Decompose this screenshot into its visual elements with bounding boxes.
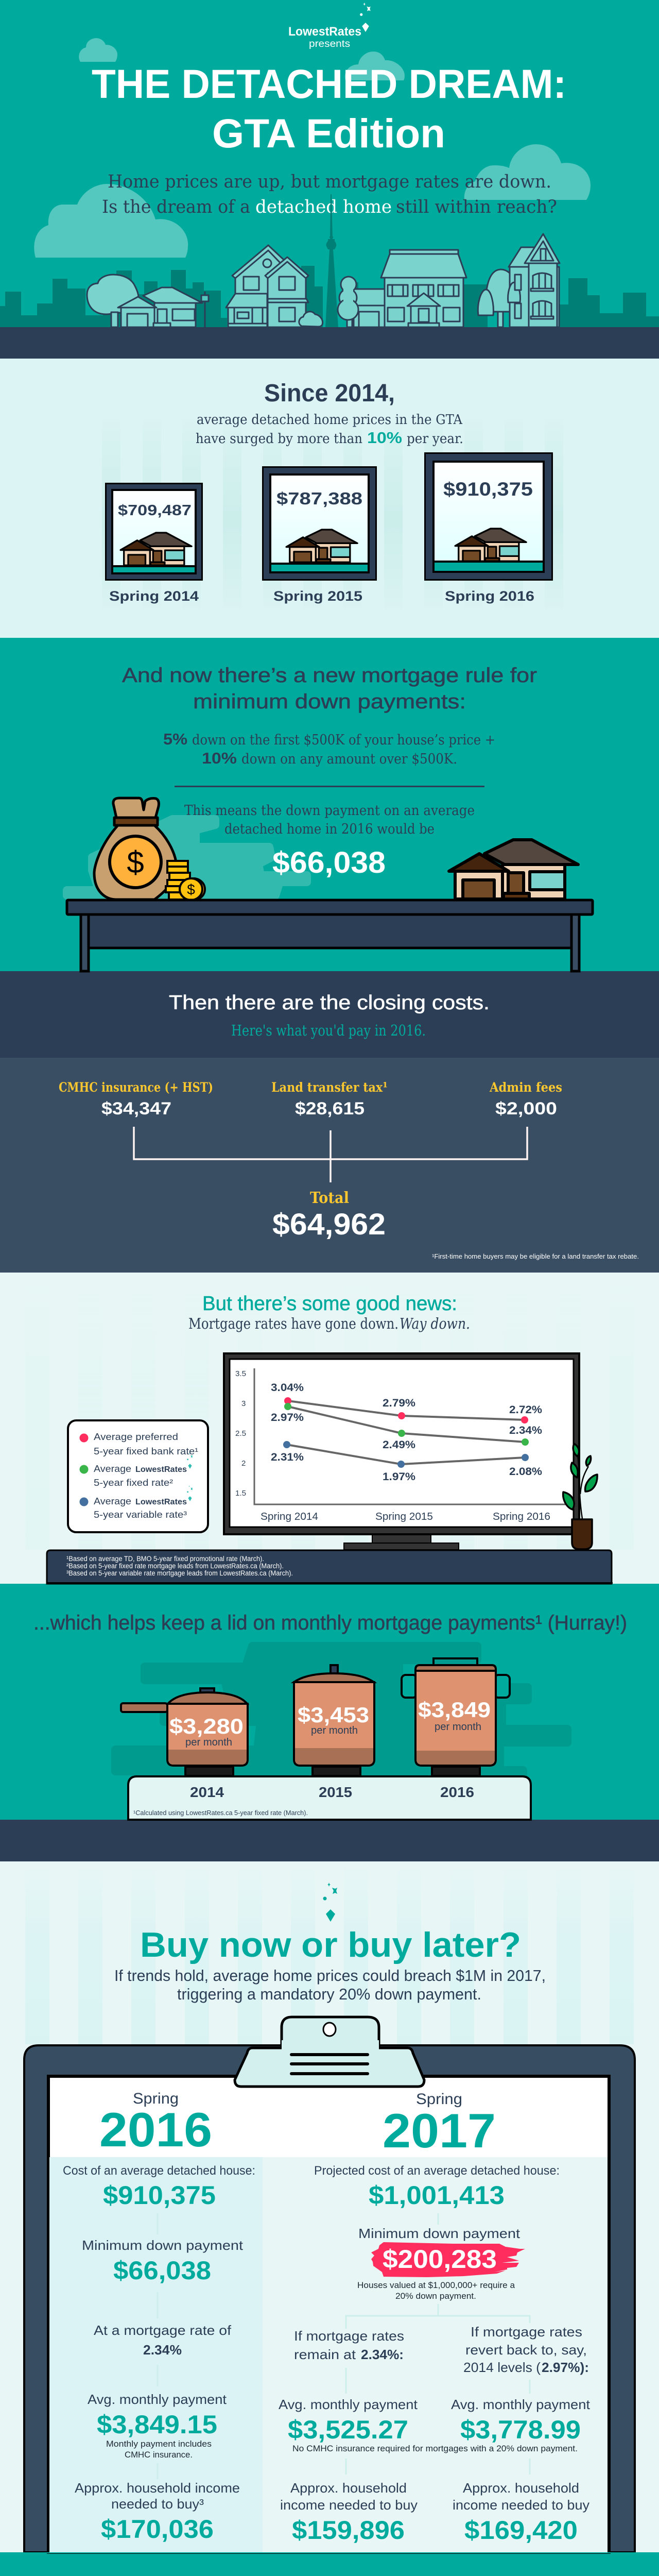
legend: [68, 1420, 208, 1532]
value labels: 3.04%: [271, 1382, 304, 1394]
background stripes: [102, 411, 563, 609]
column: 2017: $1,001,413: [369, 2181, 505, 2210]
panel: shop around: [0, 2552, 659, 2576]
down payment text: This means the down payment on an average: [184, 803, 475, 819]
legend: LowestRates: [135, 1465, 187, 1474]
column: 2017: remain at: [294, 2347, 356, 2362]
cost labels: Admin fees: [489, 1080, 562, 1095]
column: 2016: Minimum down payment: [82, 2238, 244, 2253]
y labels: 1.5: [235, 1489, 246, 1498]
x labels: [261, 1511, 550, 1522]
icon: money bag: $: [127, 845, 144, 879]
houses: [87, 234, 560, 327]
y labels: 2: [241, 1459, 246, 1468]
panel: hero: [0, 3, 659, 359]
text block: have surged by more than: [196, 431, 362, 447]
column: 2017: Projected cost of an average detached house:: [314, 2164, 560, 2178]
bracket: [134, 1127, 527, 1182]
frame: spring 2015: [263, 467, 376, 604]
panel: monthly payments: [33, 1612, 627, 1820]
plinth: [128, 1776, 531, 1820]
column: 2017: Approx. household: [290, 2480, 407, 2496]
frame: spring 2016: $910,375: [443, 479, 533, 500]
heading: And now there’s a new mortgage rule for: [122, 664, 537, 687]
cost values: $34,347: [101, 1099, 171, 1118]
column: 2017: $3,778.99: [460, 2415, 581, 2444]
pot 2016: [402, 1658, 510, 1776]
connector lines: [158, 2213, 530, 2479]
text block: [196, 412, 463, 447]
icon: two-gable house: [226, 245, 323, 327]
value labels: [271, 1382, 542, 1483]
subtitle: Is the dream of a: [102, 197, 250, 217]
intro text: If trends hold, average home prices could breach $1M in 2017,: [114, 1967, 546, 1985]
column: 2017: If mortgage rates: [294, 2328, 404, 2344]
text block: per year.: [407, 431, 463, 447]
legend: 5-year fixed bank rate¹: [94, 1446, 198, 1456]
logo: LowestRates presents: [288, 3, 371, 49]
heading: [122, 664, 537, 713]
chart: monitor: [224, 1353, 579, 1550]
icon: coins: [166, 861, 205, 900]
icon: ranch house: [87, 275, 209, 327]
callout: brush highlight: $200,283: [383, 2245, 497, 2274]
icon: sparkles: [323, 1883, 337, 1922]
down payment text: $66,038: [272, 846, 386, 879]
cost labels: [59, 1080, 562, 1095]
frame: spring 2014: [106, 483, 202, 604]
column: 2017: Minimum down payment: [358, 2226, 521, 2241]
cost values: $2,000: [495, 1099, 557, 1118]
plinth: 2015: [319, 1784, 352, 1800]
subheading: Here's what you'd pay in 2016.: [231, 1022, 426, 1039]
heading: Since 2014,: [264, 380, 395, 407]
heading: Then there are the closing costs.: [169, 992, 490, 1014]
axes: [254, 1368, 568, 1504]
column: 2016: CMHC insurance.: [125, 2450, 193, 2460]
icon: victorian house: [478, 234, 560, 327]
x labels: Spring 2015: [375, 1511, 433, 1522]
icon: wide-roof house: [338, 250, 466, 327]
total: [272, 1189, 386, 1241]
icon: money bag: [94, 798, 177, 900]
year headers: Spring: [133, 2090, 179, 2107]
frame: spring 2014: Spring 2014: [109, 588, 199, 604]
icon: plant: [563, 1444, 597, 1549]
heading: minimum down payments:: [193, 690, 466, 713]
value labels: 2.97%: [271, 1412, 304, 1423]
column: 2017: 2.97%):: [542, 2360, 589, 2375]
column: 2016: Monthly payment includes: [106, 2439, 212, 2449]
frame: spring 2015: Spring 2015: [273, 588, 362, 604]
icon: coins: $: [187, 882, 195, 897]
column: 2016: [63, 2164, 255, 2544]
down payment text: detached home in 2016 would be: [224, 821, 435, 837]
cost values: $28,615: [295, 1099, 365, 1118]
icon: smoke backdrop: [67, 819, 307, 895]
column: 2017: income needed to buy: [453, 2497, 589, 2513]
column: 2016: Cost of an average detached house:: [63, 2164, 255, 2178]
column: 2016: needed to buy³: [111, 2496, 204, 2512]
y labels: [235, 1369, 246, 1498]
column: 2017: revert back to, say,: [465, 2342, 587, 2358]
column: 2017: income needed to buy: [280, 2497, 418, 2513]
pot 2016: per month: [435, 1721, 481, 1733]
rule text: 5%: [163, 730, 187, 748]
column: 2017: Houses valued at $1,000,000+ require a: [357, 2280, 515, 2290]
year headers: [99, 2090, 496, 2158]
value labels: 1.97%: [383, 1471, 415, 1483]
column: 2016: $910,375: [103, 2181, 216, 2210]
subtitle: still within reach?: [396, 197, 557, 217]
column: 2017: $159,896: [292, 2516, 405, 2545]
cost labels: Land transfer tax¹: [271, 1080, 388, 1095]
icon: CN tower: [325, 194, 338, 327]
desk with footnotes: ³Based on 5-year variable rate mortgage leads from LowestRates.ca (March).: [66, 1569, 293, 1577]
pot 2015: $3,453: [298, 1703, 369, 1727]
smoke backdrop: [115, 1646, 567, 1776]
column: 2017: $3,525.27: [288, 2415, 408, 2444]
column: 2017: 2014 levels (: [463, 2360, 541, 2375]
clipboard: [24, 2017, 635, 2552]
year headers: 2016: [99, 2103, 212, 2157]
value labels: 2.49%: [383, 1439, 415, 1451]
callout: brush highlight: [371, 2242, 525, 2277]
panel: good news: [25, 1283, 634, 1584]
total: Total: [310, 1189, 349, 1207]
year headers: 2017: [383, 2104, 496, 2158]
plinth: 2014: [190, 1784, 224, 1800]
column: 2017: If mortgage rates: [471, 2324, 582, 2340]
panel: new mortgage rule: [67, 664, 593, 971]
heading: Buy now or buy later?: [140, 1925, 521, 1964]
y labels: 3: [241, 1399, 246, 1408]
data points: [283, 1397, 529, 1468]
pot 2014: per month: [185, 1737, 232, 1748]
panel: price growth: [102, 380, 563, 609]
frame: spring 2016: [425, 453, 552, 604]
pot 2015: [294, 1665, 374, 1776]
subheading: Way down.: [400, 1315, 470, 1332]
column: 2016: $170,036: [101, 2515, 214, 2544]
pot 2015: per month: [311, 1725, 358, 1736]
logo: LowestRates presents: LowestRates: [288, 25, 361, 39]
column: 2017: 2.34%:: [361, 2347, 404, 2362]
pot 2016: $3,849: [418, 1698, 491, 1722]
y labels: 2.5: [235, 1429, 246, 1438]
y labels: 3.5: [235, 1369, 246, 1378]
x labels: Spring 2014: [261, 1511, 318, 1522]
plinth: ¹Calculated using LowestRates.ca 5-year fixed rate (March).: [133, 1809, 308, 1817]
title: [92, 61, 566, 156]
subtitle: detached home: [255, 197, 392, 217]
clouds: [34, 38, 591, 258]
cost labels: CMHC insurance (+ HST): [59, 1080, 213, 1095]
column: 2016: $66,038: [113, 2256, 211, 2285]
skyline: [0, 266, 659, 327]
pot 2014: [121, 1688, 248, 1776]
background stripes: [25, 1283, 634, 1550]
column: 2016: 2.34%: [143, 2342, 182, 2358]
intro text: triggering a mandatory 20% down payment.: [177, 1985, 481, 2003]
legend: Average: [94, 1464, 131, 1474]
pot 2014: $3,280: [169, 1714, 244, 1738]
icon: table: [67, 900, 593, 971]
column: 2017: Approx. household: [463, 2480, 579, 2496]
legend: LowestRates: [135, 1498, 187, 1506]
subtitle: Home prices are up, but mortgage rates are down.: [108, 172, 551, 192]
cost values: [101, 1099, 557, 1118]
logo: LowestRates presents: presents: [309, 39, 350, 49]
x labels: Spring 2016: [493, 1511, 550, 1522]
data lines: [287, 1401, 525, 1464]
rule text: down on the first $500K of your house’s price +: [192, 732, 495, 748]
legend: 5-year fixed rate²: [94, 1478, 173, 1488]
icon: house: [449, 840, 578, 899]
rule text: [163, 730, 495, 767]
ground: [0, 327, 659, 359]
value labels: 2.79%: [383, 1397, 415, 1409]
column: 2016: Avg. monthly payment: [88, 2392, 227, 2407]
heading: But there’s some good news:: [202, 1293, 457, 1315]
panel: buy now or later: [24, 1869, 635, 2552]
value labels: 2.34%: [509, 1425, 542, 1436]
panel: closing costs: [59, 992, 639, 1260]
column: 2016: Approx. household income: [75, 2480, 240, 2496]
heading: ...which helps keep a lid on monthly mortgage payments¹ (Hurray!): [33, 1612, 627, 1634]
rule text: down on any amount over $500K.: [241, 751, 457, 767]
frame: spring 2014: $709,487: [118, 502, 192, 519]
column: 2017: $169,420: [464, 2516, 578, 2545]
desk with footnotes: ²Based on 5-year fixed rate mortgage leads from LowestRates.ca (March).: [66, 1562, 284, 1570]
legend: Average preferred: [94, 1432, 178, 1442]
text block: 10%: [367, 429, 402, 447]
column: 2017: No CMHC insurance required for mortgages with a 20% down payment.: [292, 2444, 578, 2453]
title: GTA Edition: [212, 110, 445, 156]
intro text: [114, 1967, 546, 2003]
column: 2016: At a mortgage rate of: [94, 2323, 232, 2338]
subtitle: [102, 172, 557, 217]
column: 2017: [279, 2164, 591, 2545]
column: 2017: Avg. monthly payment: [451, 2397, 591, 2412]
frame: spring 2016: Spring 2016: [445, 588, 534, 604]
value labels: 2.72%: [509, 1404, 542, 1416]
column: 2017: 20% down payment.: [395, 2291, 476, 2301]
title: THE DETACHED DREAM:: [92, 61, 566, 107]
legend: 5-year variable rate³: [94, 1510, 187, 1520]
down payment text: [184, 803, 475, 879]
year headers: Spring: [416, 2091, 462, 2108]
column: 2017: Avg. monthly payment: [279, 2397, 418, 2412]
footnote: ¹First-time home buyers may be eligible for a land transfer tax rebate.: [432, 1252, 639, 1260]
legend: Average: [94, 1496, 131, 1506]
total: $64,962: [272, 1208, 386, 1241]
plinth: 2016: [440, 1784, 474, 1800]
value labels: 2.08%: [509, 1466, 542, 1478]
subheading: Mortgage rates have gone down.: [188, 1315, 398, 1332]
value labels: 2.31%: [271, 1451, 304, 1463]
frame: spring 2015: $787,388: [276, 489, 362, 508]
desk with footnotes: ¹Based on average TD, BMO 5-year fixed promotional rate (March).: [66, 1555, 264, 1563]
text block: average detached home prices in the GTA: [197, 412, 463, 428]
rule text: 10%: [202, 749, 237, 767]
clip: [235, 2017, 424, 2087]
column: 2016: $3,849.15: [97, 2410, 217, 2439]
desk with footnotes: [46, 1550, 613, 1584]
background stripes: [25, 1869, 634, 2044]
